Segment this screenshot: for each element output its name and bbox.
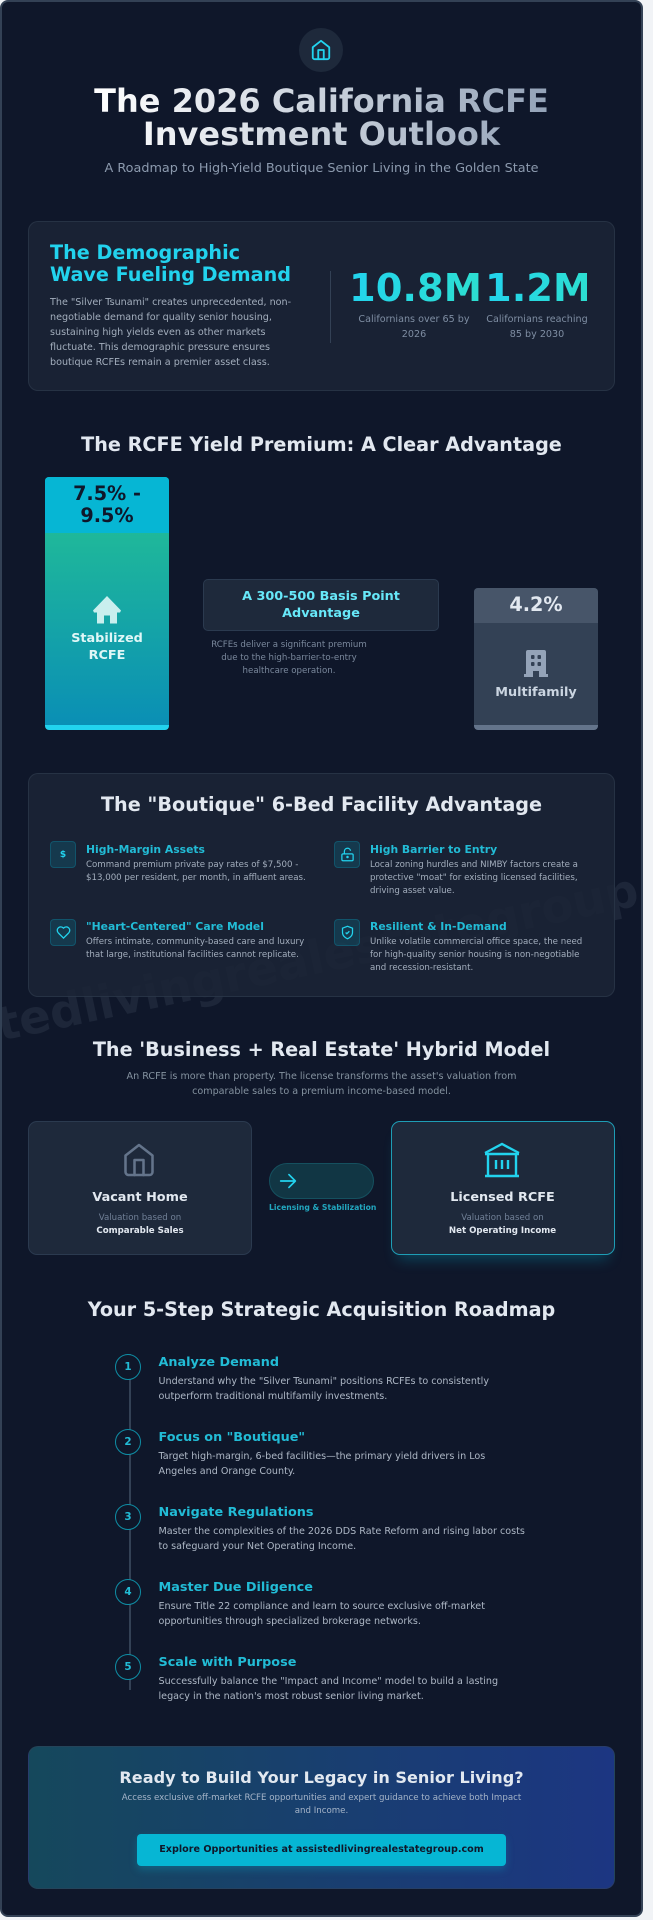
callout: basis point advantage [203, 579, 439, 631]
bar: stabilized RCFE [45, 477, 169, 730]
step number [115, 1579, 141, 1605]
CTA heading: Ready to Build Your Legacy in Senior Living? [119, 1768, 524, 1787]
callout note: healthcare operation. [243, 666, 335, 676]
timeline line [129, 1354, 131, 1690]
header icon [299, 28, 343, 72]
arrow pill [269, 1163, 374, 1199]
feature text: and recession-resistant. [370, 963, 473, 973]
card text [449, 1213, 556, 1236]
stat: 1.2M: 1.2M [485, 266, 591, 311]
bar value: 4.2% [509, 593, 563, 616]
feature text: Command premium private pay rates of $7,500 - [86, 860, 298, 870]
step text: Understand why the "Silver Tsunami" positions RCFEs to consistently [158, 1376, 489, 1387]
card text [96, 1213, 184, 1236]
feature text: for high-quality senior housing is non-negotiable [370, 950, 580, 960]
feature title: "Heart-Centered" Care Model [86, 920, 264, 933]
icon: outline house [124, 1144, 154, 1176]
step 5 [115, 1654, 498, 1702]
panel: call to action [28, 1746, 615, 1889]
step text: outperform traditional multifamily investments. [158, 1391, 387, 1402]
icon: dollar: $ [60, 850, 66, 860]
step text: Master the complexities of the 2026 DDS Rate Reform and rising labor costs [158, 1526, 525, 1537]
step title: Focus on "Boutique" [158, 1430, 305, 1445]
step number: 4 [124, 1586, 132, 1598]
step text [158, 1526, 525, 1552]
panel body text: The "Silver Tsunami" creates unprecedented, non- [50, 297, 291, 308]
step number [115, 1504, 141, 1530]
callout: basis point advantage: A 300-500 Basis Point [242, 589, 400, 604]
bar label [71, 631, 143, 663]
title [0, 85, 643, 151]
feature text [86, 860, 306, 883]
CTA button [137, 1834, 506, 1866]
panel body text: negotiable demand for quality senior housing, [50, 312, 272, 323]
icon: shield [334, 919, 360, 946]
step text [158, 1676, 498, 1702]
feature text: $13,000 per resident, per month, in affluent areas. [86, 873, 306, 883]
timeline: 5-step roadmap [115, 1354, 525, 1702]
heading: yield premium: The RCFE Yield Premium: A Clear Advantage [81, 433, 562, 456]
feature text [86, 937, 304, 960]
step 3 [115, 1504, 525, 1552]
feature text: driving asset value. [370, 886, 455, 896]
bar value [45, 477, 169, 533]
subtitle: A Roadmap to High-Yield Boutique Senior Living in the Golden State [105, 161, 538, 176]
CTA text: and Income. [295, 1806, 348, 1816]
step 4 [115, 1579, 485, 1627]
hybrid model intro: comparable sales to a premium income-based model. [192, 1086, 451, 1097]
panel: boutique advantage [28, 773, 615, 997]
feature text [370, 860, 578, 896]
bar label: Multifamily [495, 685, 577, 700]
stat label: reaching 85: Californians reaching [486, 314, 588, 325]
title: The 2026 California RCFE [94, 82, 549, 120]
CTA button: Explore Opportunities at assistedlivingrealestategroup.com [159, 1844, 484, 1855]
arrow: licensing and stabilization [269, 1163, 376, 1212]
icon: lock [334, 841, 360, 868]
panel: demographic wave [28, 221, 615, 391]
heading: hybrid model: The 'Business + Real Estate' Hybrid Model [93, 1038, 550, 1061]
panel heading: The Demographic [50, 241, 240, 264]
step text: to safeguard your Net Operating Income. [158, 1541, 356, 1552]
icon: heart [50, 919, 76, 946]
stat label: over 65 [358, 314, 470, 340]
step text: opportunities through specialized brokerage networks. [158, 1616, 421, 1627]
card: licensed RCFE [391, 1121, 615, 1255]
icon: house [93, 596, 121, 624]
card text: Valuation based on [99, 1213, 181, 1223]
stat: 10.8M: 10.8M [349, 266, 482, 311]
stat label: over 65: Californians over 65 by [358, 314, 470, 325]
bar value [474, 588, 598, 623]
feature text: Offers intimate, community-based care and luxury [86, 937, 304, 947]
CTA text [122, 1793, 522, 1816]
panel body text: sustaining high yields even as other markets [50, 327, 266, 338]
step text [158, 1376, 489, 1402]
card title: Vacant Home [92, 1190, 188, 1205]
step text: legacy in the nation's most robust senior living market. [158, 1691, 424, 1702]
callout: basis point advantage: Advantage [282, 606, 360, 621]
step title: Scale with Purpose [158, 1655, 296, 1670]
card text: Comparable Sales [96, 1226, 184, 1236]
stat label: reaching 85 [486, 314, 588, 340]
step text [158, 1451, 485, 1477]
feature: resilient and in-demand [334, 919, 582, 973]
arrow label: Licensing & Stabilization [269, 1203, 376, 1212]
feature text [370, 937, 582, 973]
icon: landmark [484, 1142, 520, 1178]
bar label: Stabilized [71, 631, 143, 646]
step number: 3 [124, 1511, 132, 1523]
step title: Analyze Demand [158, 1355, 279, 1370]
stat label: over 65: 2026 [402, 329, 426, 340]
step title: Navigate Regulations [158, 1505, 313, 1520]
icon: building [524, 650, 548, 677]
feature title: Resilient & In-Demand [370, 920, 507, 933]
step text [158, 1601, 485, 1627]
step title: Master Due Diligence [158, 1580, 313, 1595]
panel body text: fluctuate. This demographic pressure ensures [50, 342, 270, 353]
panel body text: boutique RCFEs remain a premier asset class. [50, 357, 270, 368]
step number [115, 1354, 141, 1380]
title: Investment Outlook [143, 115, 500, 153]
step text: Successfully balance the "Impact and Income" model to build a lasting [158, 1676, 498, 1687]
hybrid model intro [126, 1071, 516, 1097]
feature title: High Barrier to Entry [370, 843, 497, 856]
step text: Angeles and Orange County. [158, 1466, 295, 1477]
feature title: High-Margin Assets [86, 843, 205, 856]
callout note: RCFEs deliver a significant premium [211, 640, 367, 650]
bar value: 9.5% [80, 504, 134, 526]
bar label: RCFE [89, 648, 125, 663]
step text: Ensure Title 22 compliance and learn to source exclusive off-market [158, 1601, 485, 1612]
hybrid model intro: An RCFE is more than property. The license transforms the asset's valuation from [127, 1071, 516, 1082]
card title: Licensed RCFE [450, 1190, 555, 1205]
CTA text: Access exclusive off-market RCFE opportunities and expert guidance to achieve both Impact [122, 1793, 521, 1803]
step number [115, 1429, 141, 1455]
feature: high-margin assets [50, 841, 306, 883]
feature text: protective "moat" for existing licensed facilities, [370, 873, 578, 883]
panel heading: Wave Fueling Demand [50, 263, 291, 286]
bar: multifamily [474, 588, 598, 730]
step 2 [115, 1429, 485, 1477]
feature text: Local zoning hurdles and NIMBY factors create a [370, 860, 578, 870]
step number [115, 1654, 141, 1680]
card: vacant home [28, 1121, 252, 1255]
heading: roadmap: Your 5-Step Strategic Acquisition Roadmap [88, 1298, 555, 1321]
feature: high barrier to entry [334, 841, 578, 896]
callout note [211, 640, 367, 676]
card text: Valuation based on [461, 1213, 544, 1223]
feature text: Unlike volatile commercial office space, the need [370, 937, 582, 947]
panel heading: The "Boutique" 6-Bed Facility Advantage [101, 793, 542, 816]
card text: Net Operating Income [449, 1226, 556, 1236]
step number: 2 [124, 1436, 132, 1448]
step text: Target high-margin, 6-bed facilities—the primary yield drivers in Los [158, 1451, 485, 1462]
divider [330, 271, 331, 343]
panel body text [50, 297, 291, 368]
icon: dollar [50, 841, 76, 868]
step number: 5 [124, 1661, 132, 1673]
step 1 [115, 1354, 489, 1402]
stat label: reaching 85: 85 by 2030 [510, 329, 564, 340]
feature: heart-centered care [50, 919, 304, 960]
step number: 1 [124, 1361, 132, 1373]
feature text: that large, institutional facilities cannot replicate. [86, 950, 299, 960]
callout note: due to the high-barrier-to-entry [221, 653, 357, 663]
bar value: 7.5% - [73, 482, 141, 505]
panel heading [50, 241, 291, 286]
